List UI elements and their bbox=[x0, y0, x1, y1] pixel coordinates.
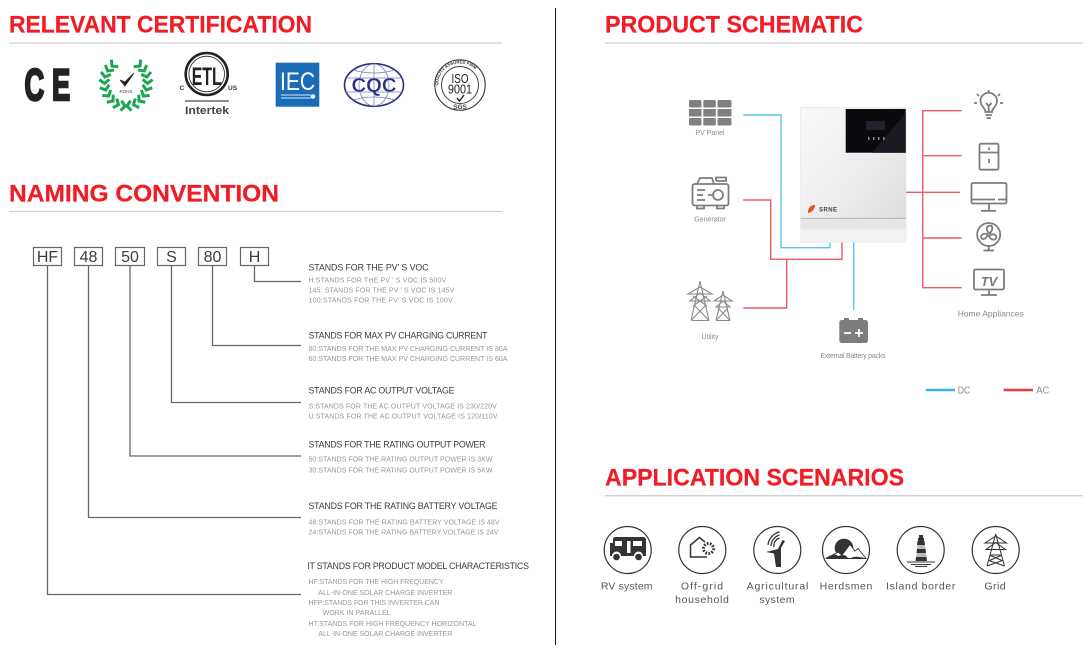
icon: utility towers: Utility bbox=[701, 334, 719, 341]
icon: ETL Intertek mark: US bbox=[228, 85, 238, 92]
scenario: island border: Island border bbox=[886, 581, 956, 593]
scenario: agricultural system: system bbox=[759, 594, 795, 606]
icon: ISO 9001 mark: SGS bbox=[453, 104, 468, 111]
text block: max PV charging current: 60:STANDS FOR THE MAX PV CHARGING CURRENT IS 60A bbox=[308, 356, 508, 363]
panel: relevant certification bbox=[9, 12, 502, 117]
model code boxes: HF bbox=[37, 249, 58, 266]
scenario: agricultural system bbox=[747, 526, 808, 606]
text block: AC output voltage: STANDS FOR AC OUTPUT VOLTAGE bbox=[308, 386, 455, 396]
scenario: herdsmen bbox=[820, 526, 873, 593]
model code boxes: 48 bbox=[80, 249, 98, 266]
icon: PV panel bbox=[689, 100, 732, 137]
icon: battery bbox=[820, 318, 886, 360]
text block: product model characteristics: HFP:STANDS FOR THIS INVERTER CAN bbox=[308, 600, 440, 607]
text block: product model characteristics bbox=[307, 561, 529, 638]
icon: IEC mark: IEC bbox=[280, 68, 315, 96]
icon: RoHS wreath: ROHS bbox=[119, 89, 133, 94]
text block: product model characteristics: IT STANDS FOR PRODUCT MODEL CHARACTERISTICS bbox=[307, 561, 529, 571]
text block: rating output power: STANDS FOR THE RATING OUTPUT POWER bbox=[308, 440, 486, 450]
icon: light bulb bbox=[974, 90, 1003, 118]
icon: ISO 9001 mark bbox=[434, 59, 486, 111]
model code boxes: H bbox=[249, 249, 260, 266]
panel: product schematic bbox=[605, 12, 1083, 396]
DC wiring bbox=[743, 115, 854, 310]
text block: rating output power: 50:STANDS FOR THE RATING OUTPUT POWER IS 3KW bbox=[308, 457, 493, 464]
heading: product schematic: PRODUCT SCHEMATIC bbox=[605, 12, 863, 39]
inverter: SRNE bbox=[819, 208, 837, 214]
text block: max PV charging current bbox=[308, 331, 508, 363]
text block: PV VOC: 100:STANDS FOR THE PV’ S VOC IS 100V bbox=[308, 298, 453, 305]
scenario: grid: Grid bbox=[984, 581, 1006, 593]
icon: CQC mark: CQC bbox=[352, 75, 396, 97]
icon: ETL Intertek mark: ETL bbox=[192, 63, 222, 91]
icon: ISO 9001 mark: ISO bbox=[452, 71, 468, 86]
text block: rating output power: 30:STANDS FOR THE RATING OUTPUT POWER IS 5KW bbox=[308, 467, 493, 474]
scenario: herdsmen: Herdsmen bbox=[820, 581, 873, 593]
icon: ETL Intertek mark: Intertek bbox=[185, 105, 230, 117]
model code boxes: 80 bbox=[204, 249, 222, 266]
text block: product model characteristics: HF:STANDS FOR THE HIGH FREQUENCY bbox=[308, 579, 444, 586]
inverter bbox=[801, 108, 906, 242]
label: home appliances: Home Appliances bbox=[958, 309, 1024, 319]
text block: product model characteristics: WORK IN PARALLEL bbox=[323, 610, 391, 617]
icon: utility towers bbox=[688, 281, 732, 341]
model code boxes: 50 bbox=[121, 249, 139, 266]
legend: DC and AC: AC bbox=[1036, 386, 1049, 396]
leader lines bbox=[48, 266, 301, 594]
icon: TV: TV bbox=[981, 274, 999, 289]
icon: generator: Generator bbox=[694, 217, 726, 224]
scenario: off-grid household: household bbox=[675, 594, 729, 606]
icon: ISO 9001 mark: 9001 bbox=[448, 82, 472, 96]
text block: rating battery voltage bbox=[308, 501, 500, 536]
icon: battery: External Battery packs bbox=[820, 353, 886, 360]
model code boxes: S bbox=[166, 249, 177, 266]
icon: ISO 9001 mark: QUALITY ASSURED FIRM bbox=[435, 60, 477, 86]
icon: refrigerator bbox=[980, 144, 998, 170]
text block: PV VOC: H:STANDS FOR THE PV ’ S VOC IS 500V bbox=[308, 278, 447, 285]
icon: CE mark bbox=[24, 59, 70, 110]
scenario: agricultural system: Agricultural bbox=[747, 581, 808, 593]
text block: AC output voltage: U:STANDS FOR THE AC OUTPUT VOLTAGE IS 120/110V bbox=[308, 413, 498, 420]
icon: RoHS wreath bbox=[99, 60, 153, 111]
icon: fan bbox=[977, 223, 1000, 250]
panel: application scenarios bbox=[601, 465, 1083, 606]
heading: relevant certification: RELEVANT CERTIFICATION bbox=[9, 12, 312, 39]
text block: PV VOC bbox=[308, 262, 455, 305]
icon: CQC mark bbox=[344, 64, 404, 106]
icon: PV panel: PV Panel bbox=[695, 130, 725, 137]
legend: DC and AC: DC bbox=[958, 386, 970, 396]
text block: product model characteristics: ALL-IN-ONE SOLAR CHARGE INVERTER bbox=[318, 631, 452, 638]
text block: max PV charging current: STANDS FOR MAX PV CHARGING CURRENT bbox=[308, 331, 488, 341]
scenario: grid bbox=[972, 526, 1019, 593]
text block: rating battery voltage: 48:STANDS FOR THE RATING BATTERY VOLTAGE IS 48V bbox=[308, 519, 500, 526]
icon: CE mark: C bbox=[24, 59, 44, 110]
icon: TV bbox=[974, 270, 1004, 295]
text block: PV VOC: 145: STANDS FOR THE PV ’ S VOC IS 145V bbox=[308, 288, 455, 295]
text block: AC output voltage: S:STANDS FOR THE AC OUTPUT VOLTAGE IS 230/220V bbox=[308, 403, 497, 410]
heading: naming convention: NAMING CONVENTION bbox=[9, 181, 279, 208]
scenario: RV system bbox=[601, 526, 653, 593]
scenario: island border bbox=[886, 526, 956, 593]
scenario: off-grid household bbox=[675, 526, 729, 606]
text block: product model characteristics: ALL-IN-ONE SOLAR CHARGE INVERTER bbox=[318, 590, 452, 597]
icon: CE mark: E bbox=[52, 59, 70, 110]
icon: ETL Intertek mark bbox=[180, 53, 238, 117]
text block: PV VOC: STANDS FOR THE PV’ S VOC bbox=[308, 262, 429, 272]
text block: AC output voltage bbox=[308, 386, 498, 420]
text block: rating battery voltage: 24:STANDS FOR THE RATING BATTERY VOLTAGE IS 24V bbox=[308, 529, 499, 536]
legend: DC and AC bbox=[926, 386, 1049, 396]
text block: product model characteristics: HT:STANDS FOR HIGH FREQUENCY HORIZONTAL bbox=[308, 621, 477, 628]
icon: ETL Intertek mark: C bbox=[180, 85, 184, 92]
scenario: RV system: RV system bbox=[601, 581, 653, 593]
text block: max PV charging current: 80:STANDS FOR THE MAX PV CHARGING CURRENT IS 80A bbox=[308, 346, 508, 353]
icon: IEC mark bbox=[276, 63, 319, 107]
model code boxes bbox=[34, 248, 268, 266]
icon: generator bbox=[692, 178, 728, 224]
text block: rating battery voltage: STANDS FOR THE RATING BATTERY VOLTAGE bbox=[308, 501, 498, 511]
AC wiring bbox=[743, 111, 962, 308]
panel: naming convention bbox=[9, 181, 529, 638]
scenario: off-grid household: Off-grid bbox=[681, 581, 723, 593]
icon: monitor bbox=[972, 183, 1006, 211]
heading: application scenarios: APPLICATION SCENARIOS bbox=[605, 465, 904, 492]
text block: rating output power bbox=[308, 440, 493, 474]
